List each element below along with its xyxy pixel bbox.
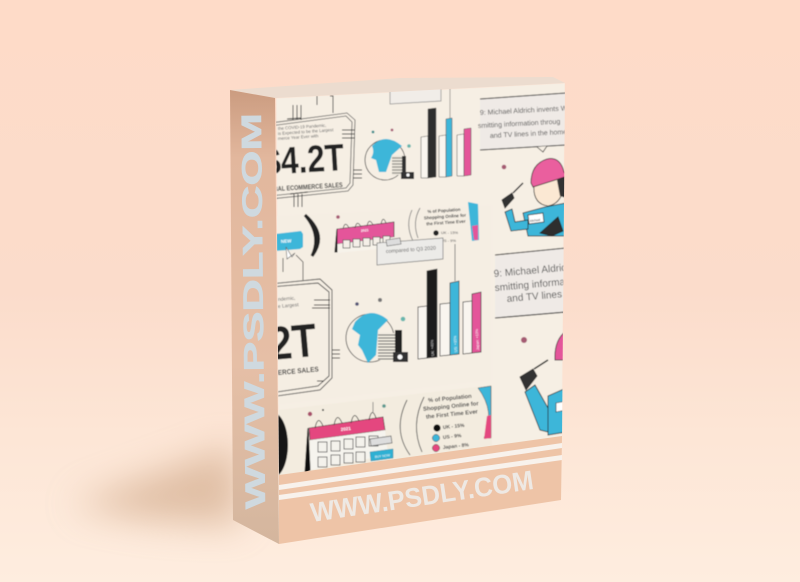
black bracket shape [305, 215, 319, 256]
value 2T: 2T [267, 313, 319, 370]
panel: population ring, middle: the First Time Ever [426, 219, 466, 226]
globe with coins, middle [346, 298, 408, 363]
panel: timeline quote, middle: 9: Michael Aldrich [493, 262, 572, 280]
legend: UK - 15% [443, 423, 465, 431]
legend [432, 423, 470, 452]
illustration: engineer, top [502, 159, 568, 236]
button: new [275, 231, 303, 280]
box spine [230, 90, 279, 544]
panel: population ring, middle: Shopping Online for [424, 213, 466, 220]
button: buy now: BUY NOW [375, 453, 390, 459]
name tag [555, 400, 562, 413]
button: new: NEW [281, 238, 292, 244]
body [523, 203, 566, 236]
box shadow [70, 445, 240, 525]
panel: population ring, middle: % of Population [427, 207, 461, 214]
helmet [554, 332, 563, 361]
gauge and tool [520, 369, 537, 390]
gauge and tool [502, 193, 514, 208]
panel: population ring, middle [409, 202, 479, 244]
panel: timeline quote, middle [494, 247, 564, 344]
bar chart, top [421, 88, 471, 178]
arm [505, 209, 528, 231]
body [546, 388, 562, 436]
panel: population ring, lower: the First Time Ever [426, 409, 479, 421]
panel: population ring, lower [400, 386, 491, 455]
bar chart, middle: Japan: +13% [475, 328, 480, 350]
panel: population ring, middle: US - 9% [441, 238, 456, 243]
bar chart, middle: UK: +46% [430, 339, 435, 356]
callout: compared to Q3 2020 [377, 238, 443, 265]
panel: timeline quote, middle: and TV lines in [506, 288, 573, 305]
value $4.2T: $4.2T [262, 137, 345, 184]
intro text [278, 123, 334, 141]
helmet [531, 159, 568, 187]
calendar, middle: 2021 [361, 228, 369, 233]
panel: second artwork layer [278, 298, 279, 374]
calendar, lower: 2021 [341, 426, 352, 432]
top top-up callout box [390, 87, 441, 104]
calendar, lower [305, 402, 393, 473]
bar chart, middle [418, 244, 481, 359]
intro text: merce Year Ever with [278, 133, 319, 141]
callout: compared to Q3 2020: compared to Q3 2020 [386, 246, 436, 255]
face [532, 180, 562, 207]
keyboard [540, 217, 563, 236]
name tag: Michael [530, 218, 541, 223]
circuit frame with 2T [278, 278, 340, 397]
black circle shape [278, 414, 289, 475]
panel: timeline quote, top: smitting information throug [478, 119, 561, 130]
label commerce sales: ERCE SALES [278, 366, 319, 377]
band brand text: WWW.PSDLY.COM [308, 465, 535, 528]
panel: timeline quote, top: 9: Michael Aldrich invents W [480, 105, 568, 117]
intro text: the COVID-19 Pandemic, [278, 123, 326, 131]
white stripes [279, 443, 562, 500]
box lid [230, 77, 565, 98]
panel: timeline quote, top: and TV lines in the home [490, 129, 567, 140]
calendar, middle [335, 215, 397, 253]
spine brand text: WWW.PSDLY.COM [236, 113, 271, 509]
intro text: e Largest [278, 302, 300, 310]
illustration: engineer, lower [520, 331, 566, 435]
intro text [278, 296, 299, 308]
legend: Japan - 8% [443, 442, 470, 451]
panel: third artwork layer [308, 426, 439, 470]
globe with coins, top [365, 129, 414, 180]
diamond [502, 165, 506, 169]
panel: timeline quote, top [478, 93, 568, 152]
panel: population ring, middle: UK - 15% [441, 230, 459, 235]
legend: US - 9% [443, 433, 462, 441]
panel: population ring, lower: Shopping Online for [423, 401, 480, 413]
panel: population ring, lower: % of Population [428, 394, 472, 404]
circuit frame with $4.2T [276, 95, 362, 208]
front bottom band [279, 436, 562, 544]
intro text: ndemic, [278, 295, 296, 303]
bar chart, middle: US: +15% [453, 335, 458, 352]
box front artwork [276, 83, 565, 475]
arm [525, 385, 552, 432]
label global ecommerce sales: GLOBAL ECOMMERCE SALES [262, 182, 343, 194]
panel: timeline quote, middle: smitting information [494, 275, 582, 294]
intro text: is Expected to be the Largest [278, 127, 334, 136]
